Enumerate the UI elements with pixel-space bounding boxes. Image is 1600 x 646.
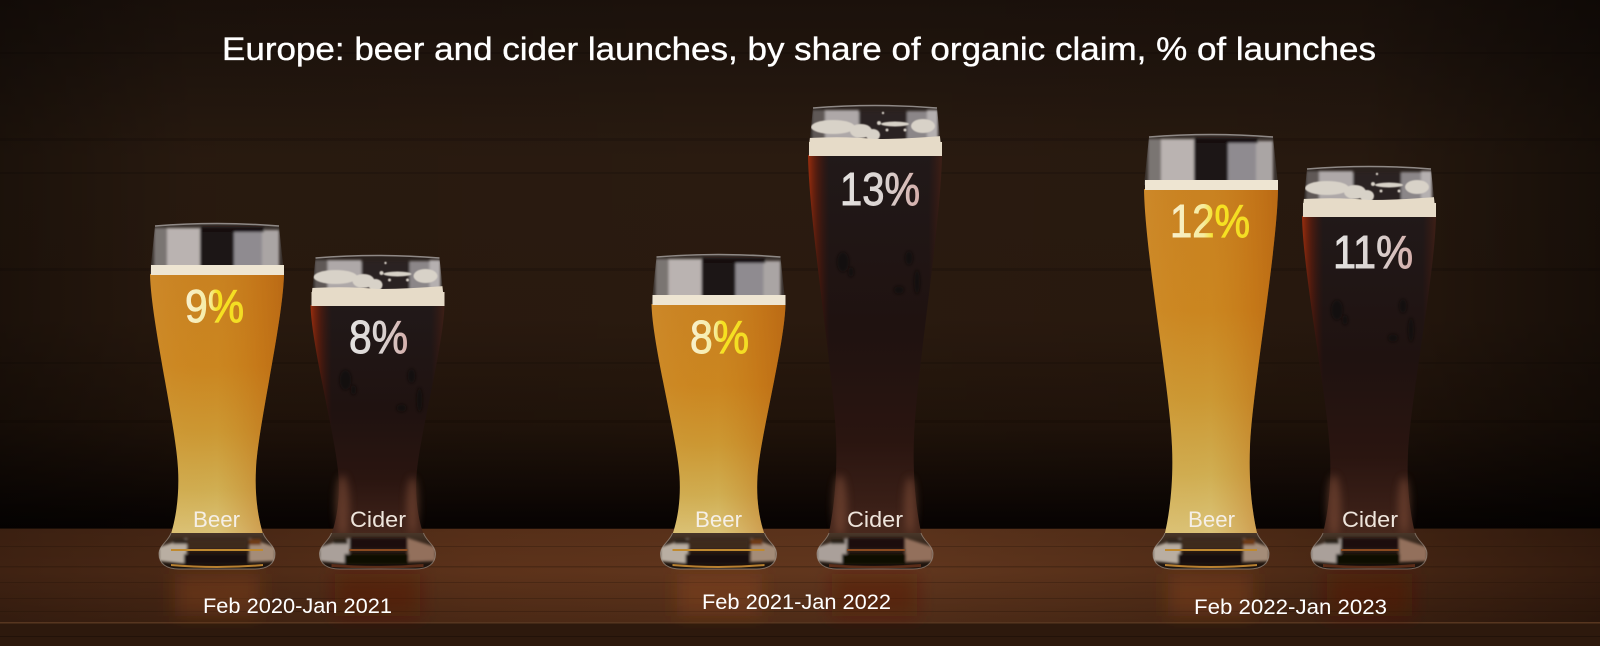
- title: Europe: beer and cider launches, by share of organic claim, % of launches: [222, 31, 1376, 67]
- period group: Feb 2022-Jan 2023: [1141, 131, 1439, 619]
- label: cider: Cider: [1342, 507, 1398, 532]
- label: beer: Beer: [193, 507, 240, 532]
- value: beer 8%: 8%: [690, 311, 749, 363]
- label: cider: Cider: [350, 507, 406, 532]
- value: cider 8%: 8%: [349, 311, 408, 363]
- period group: Feb 2021-Jan 2022: [648, 102, 945, 614]
- value: cider 11%: 11%: [1333, 226, 1413, 278]
- glass: beer 12%: [1141, 131, 1281, 571]
- glass: cider 11%: [1299, 163, 1439, 571]
- value: cider 13%: 13%: [840, 163, 920, 215]
- period label: Feb 2020-Jan 2021: [203, 595, 392, 618]
- glass: beer 9%: [147, 220, 287, 571]
- glass: beer 8%: [648, 251, 788, 571]
- glass: cider 8%: [308, 252, 448, 571]
- period label: Feb 2021-Jan 2022: [702, 591, 891, 614]
- label: cider: Cider: [847, 507, 903, 532]
- value: beer 12%: 12%: [1170, 195, 1250, 247]
- period label: Feb 2022-Jan 2023: [1194, 596, 1387, 619]
- glass reflections on the table: [175, 574, 1412, 616]
- value: beer 9%: 9%: [185, 280, 244, 332]
- glass: cider 13%: [805, 102, 945, 571]
- wooden table top: [0, 528, 1600, 646]
- label: beer: Beer: [1188, 507, 1235, 532]
- period group: Feb 2020-Jan 2021: [147, 220, 448, 618]
- label: beer: Beer: [695, 507, 742, 532]
